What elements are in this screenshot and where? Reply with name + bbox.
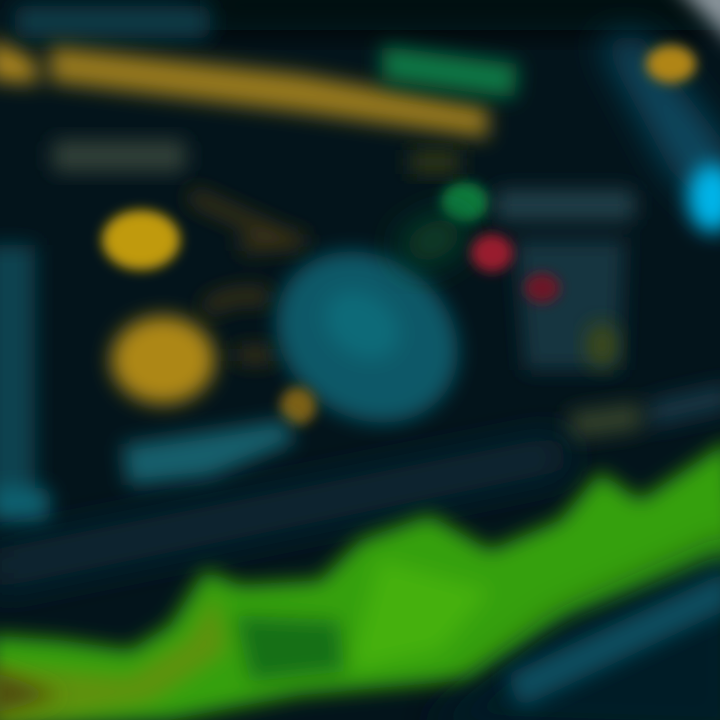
red dots bbox=[471, 234, 560, 303]
dark lower right wedge bbox=[420, 545, 720, 720]
yellow circle 2 bbox=[111, 316, 215, 404]
dim green link bbox=[395, 210, 470, 270]
teal disc bbox=[242, 216, 492, 458]
small orange dot bbox=[280, 387, 316, 425]
green tag bbox=[382, 46, 518, 98]
olive label bbox=[410, 150, 460, 174]
right blue diagonal bbox=[600, 35, 720, 230]
chart panel bbox=[495, 190, 635, 370]
teal bottom right bar bbox=[506, 570, 720, 708]
olive marker bbox=[586, 323, 618, 367]
top dark band bbox=[200, 0, 720, 30]
right orange dot bbox=[646, 45, 696, 83]
orange title band bbox=[0, 38, 488, 138]
top left heading bbox=[15, 6, 210, 38]
green area chart bbox=[0, 440, 720, 720]
low right label bbox=[568, 382, 720, 440]
dim connector lines bbox=[190, 195, 305, 355]
green dot bbox=[441, 182, 489, 222]
cyan highlight bbox=[688, 164, 720, 232]
teal pill bbox=[122, 420, 295, 486]
top right corner highlight bbox=[670, 0, 720, 50]
dark teal band bbox=[0, 435, 570, 590]
subheading bbox=[52, 140, 186, 172]
left teal column bbox=[0, 245, 50, 522]
yellow circle 1 bbox=[102, 210, 180, 270]
area chart shadow bbox=[0, 670, 60, 715]
